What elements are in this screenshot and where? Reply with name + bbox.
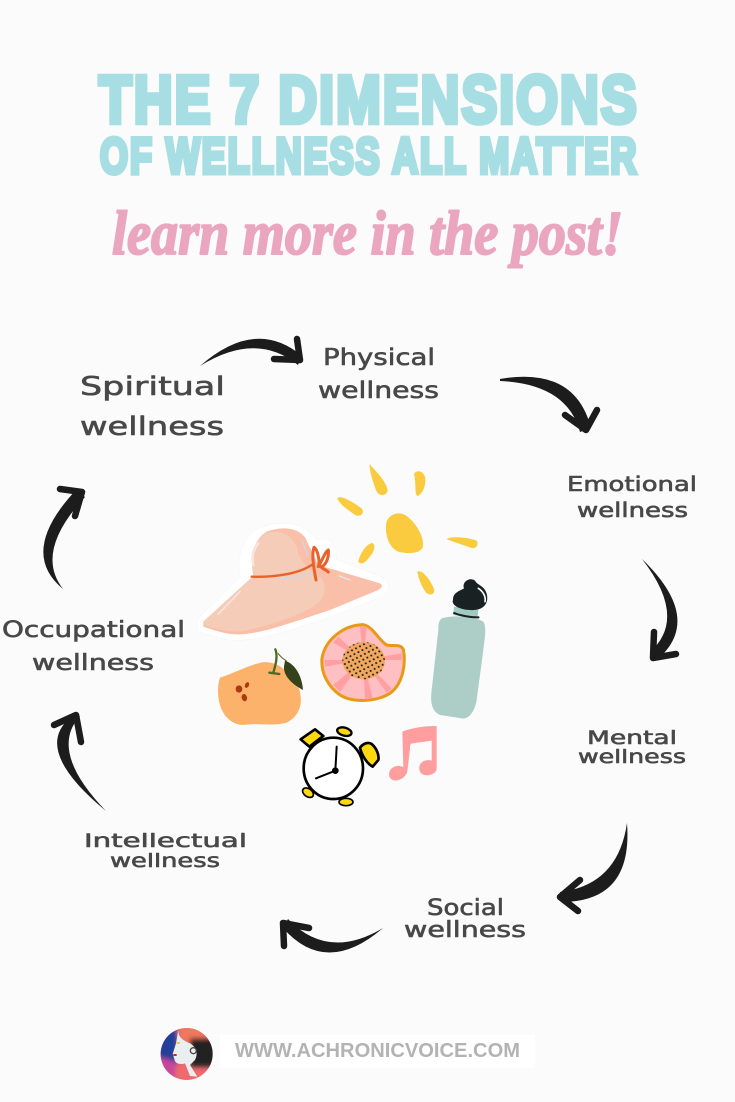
label: occupational wellness [2, 618, 185, 676]
icon: alarm clock [301, 726, 379, 806]
label: physical wellness: Physical [323, 345, 435, 371]
label: spiritual wellness: Spiritual [80, 372, 225, 402]
illustration cluster [203, 464, 487, 806]
label: emotional wellness: Emotional [567, 472, 697, 496]
arrow: intellectual to occupational [54, 715, 106, 811]
title [99, 62, 637, 184]
icon: orange [218, 649, 303, 725]
icon: sun hat [203, 528, 382, 634]
subtitle: learn more in the post! [112, 200, 623, 268]
label: occupational wellness: wellness [32, 651, 154, 676]
icon: peach [322, 625, 404, 700]
icon: sun [337, 464, 478, 594]
title line 2: OF WELLNESS ALL MATTER [100, 129, 636, 184]
label: emotional wellness: wellness [577, 498, 688, 522]
arrow: emotional to mental [642, 559, 677, 658]
arrow: occupational to spiritual [43, 489, 85, 589]
label: mental wellness: Mental [587, 727, 677, 749]
label: mental wellness [578, 727, 686, 768]
icon: logo woman portrait [160, 1028, 213, 1080]
label: physical wellness [318, 345, 439, 404]
label: physical wellness: wellness [318, 378, 439, 404]
arrow: mental to social [560, 823, 627, 911]
label: social wellness: Social [427, 896, 504, 921]
icon: water bottle [431, 579, 487, 719]
label: intellectual wellness [84, 830, 247, 872]
arrow: physical to emotional [500, 377, 597, 432]
label: emotional wellness [567, 472, 697, 522]
arrow: social to intellectual [283, 919, 383, 952]
footer: website strip [220, 1035, 535, 1068]
label: social wellness [404, 896, 526, 943]
arrow: spiritual to physical [200, 339, 302, 366]
label: occupational wellness: Occupational [2, 618, 185, 643]
label: mental wellness: wellness [578, 746, 686, 768]
label: spiritual wellness [80, 372, 225, 442]
label: social wellness: wellness [404, 918, 526, 943]
label: intellectual wellness: Intellectual [84, 830, 247, 852]
footer: website strip: WWW.ACHRONICVOICE.COM [235, 1040, 520, 1062]
title line 1: THE 7 DIMENSIONS [99, 62, 637, 137]
label: intellectual wellness: wellness [110, 850, 220, 872]
icon: music note [389, 726, 437, 781]
label: spiritual wellness: wellness [80, 412, 224, 442]
